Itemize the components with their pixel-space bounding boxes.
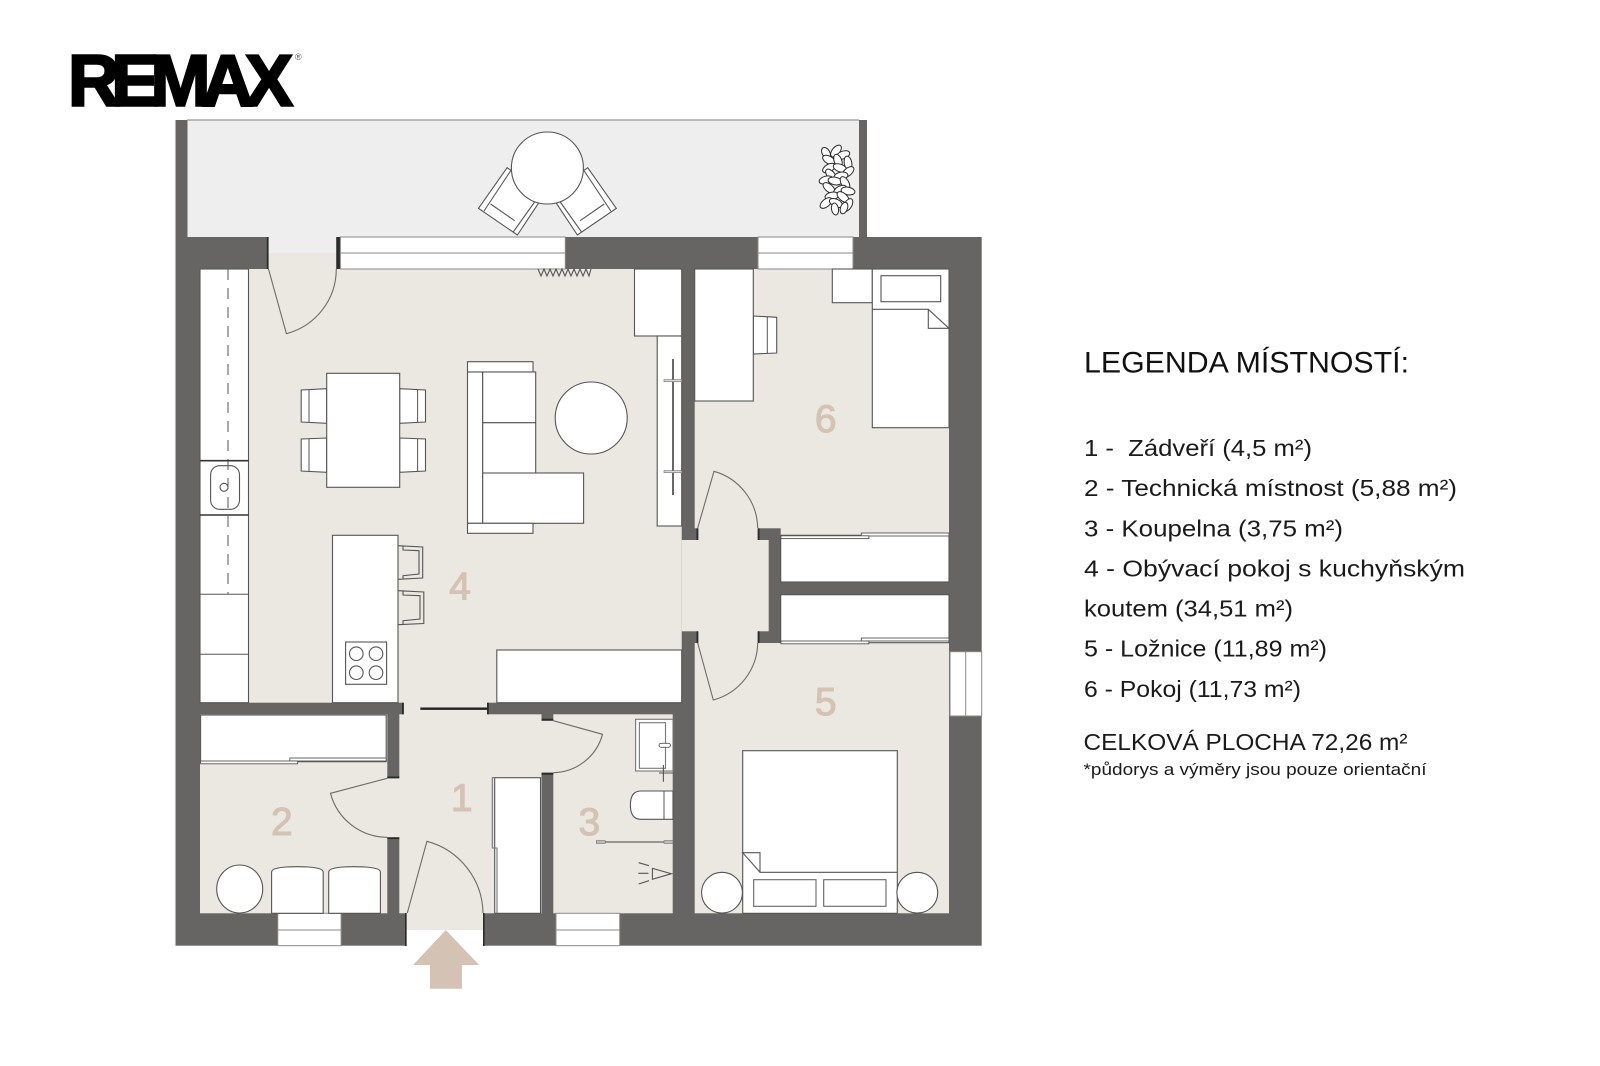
bar stools — [398, 546, 424, 625]
room number 4: 4 — [449, 566, 471, 608]
kitchen counter — [200, 269, 248, 703]
closet room 2 — [201, 715, 386, 764]
room number 1: 1 — [451, 777, 473, 820]
legend: room 2: 2 - Technická místnost (5,88 m²) — [1084, 475, 1457, 501]
dining chairs — [301, 389, 426, 472]
balcony plant — [818, 143, 856, 216]
balcony door opening — [268, 237, 336, 253]
doors — [268, 269, 758, 913]
coffee table — [555, 382, 627, 454]
dining table and chairs — [301, 373, 426, 487]
room floors — [200, 253, 949, 930]
legend: room 4: 4 - Obývací pokoj s kuchyňským — [1084, 556, 1465, 582]
walls — [176, 237, 982, 946]
bathroom sink — [636, 719, 673, 782]
legend: room 4 continued: koutem (34,51 m²) — [1084, 596, 1293, 622]
room number 6: 6 — [815, 398, 837, 441]
logo: RE/MAX: ® — [295, 52, 302, 62]
bathroom fixtures — [596, 719, 673, 884]
balcony table — [511, 132, 583, 204]
radiator — [538, 269, 591, 276]
boiler and washing machines — [217, 865, 380, 913]
sofa — [468, 362, 584, 533]
sink — [211, 466, 240, 509]
disclaimer note: *půdorys a výměry jsou pouze orientační — [1084, 760, 1427, 779]
bed room 6 — [872, 269, 949, 428]
entrance opening — [407, 930, 483, 946]
legend: room 6: 6 - Pokoj (11,73 m²) — [1084, 676, 1301, 702]
legend: room 1: 1 - Zádveří (4,5 m²) — [1084, 435, 1312, 461]
balcony chair right — [556, 168, 616, 235]
cabinet: living room — [497, 650, 682, 703]
wardrobe with hanger rod — [657, 336, 682, 526]
floor plan — [176, 120, 982, 946]
closet hall — [492, 778, 540, 913]
room number 3: 3 — [579, 801, 600, 844]
cooktop — [346, 642, 387, 684]
logo: RE/MAX: REMAX — [68, 42, 293, 122]
legend — [1084, 347, 1465, 779]
bedside cabinet room 6 — [832, 269, 872, 303]
balcony chair left — [478, 168, 539, 235]
entrance arrow — [413, 930, 479, 989]
closets — [781, 533, 949, 644]
room numbers — [271, 398, 837, 844]
double bed room 5 — [743, 751, 897, 913]
room number 5: 5 — [815, 681, 837, 724]
room number 2: 2 — [271, 801, 293, 844]
balcony table and chairs — [478, 132, 616, 235]
legend heading: LEGENDA MÍSTNOSTÍ: — [1084, 347, 1409, 380]
shower head — [638, 863, 671, 884]
kitchen island — [332, 535, 424, 703]
windows — [278, 237, 982, 946]
dining table — [327, 373, 400, 487]
total area: CELKOVÁ PLOCHA 72,26 m² — [1084, 729, 1408, 755]
toilet — [630, 791, 673, 819]
sliding door — [420, 708, 487, 710]
fridge — [634, 269, 682, 336]
balcony — [176, 120, 867, 240]
desk and chair — [695, 269, 777, 401]
shower rail — [596, 841, 673, 843]
bedside tables room 5 — [702, 872, 938, 913]
legend: room 3: 3 - Koupelna (3,75 m²) — [1084, 515, 1343, 541]
door jambs — [267, 237, 760, 946]
legend: room 5: 5 - Ložnice (11,89 m²) — [1084, 636, 1327, 662]
